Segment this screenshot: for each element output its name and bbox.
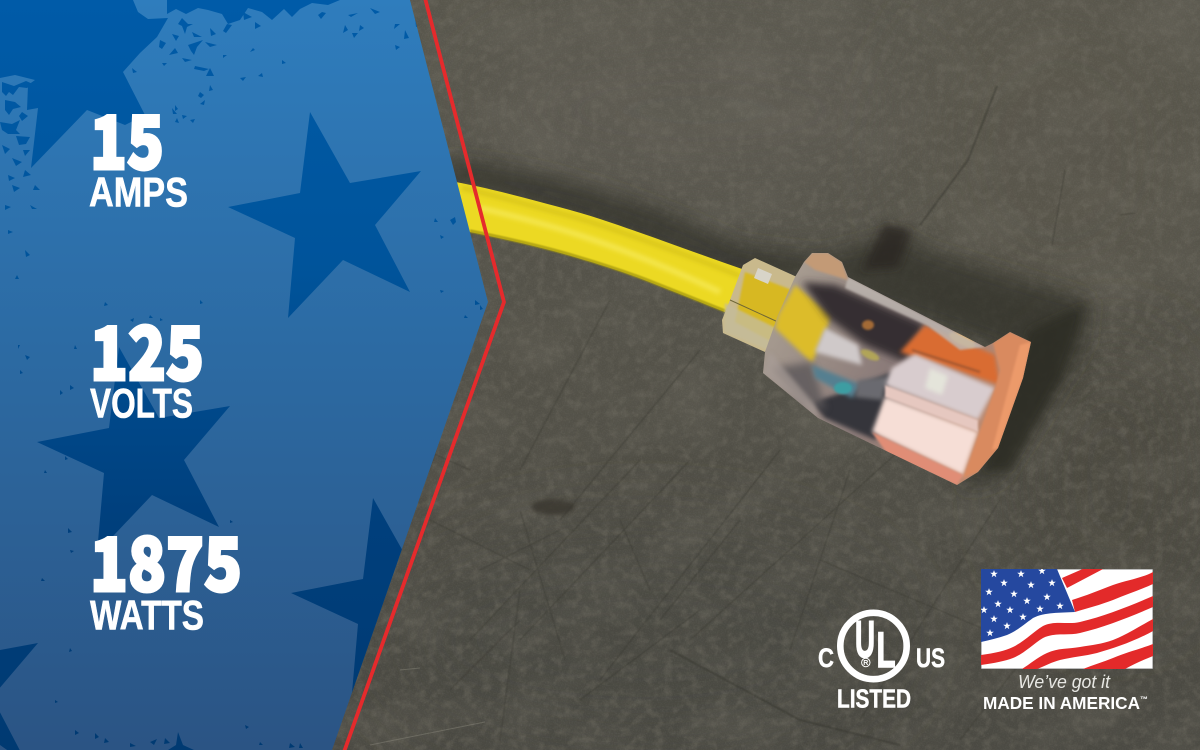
spec: 15 amps: 15	[90, 84, 164, 191]
shadow: cord and plug on floor	[440, 160, 1090, 490]
yellow extension cord	[445, 180, 745, 312]
star: behind 125 volts	[37, 347, 230, 553]
flag canton	[981, 569, 1075, 642]
badge: UL listed: US	[916, 643, 945, 673]
wires	[812, 365, 862, 398]
red chevron line	[344, 0, 504, 750]
white socket blocks	[885, 354, 995, 420]
dark internal wiring	[802, 282, 925, 362]
lit end cap	[963, 332, 1031, 478]
text: made in America: ™	[1140, 695, 1148, 704]
star: lower right, clipped	[291, 498, 402, 692]
blue chevron panel with stars	[0, 0, 488, 750]
star: bottom fragment	[168, 732, 194, 750]
star: top left	[0, 0, 168, 168]
star: center right	[228, 112, 421, 318]
text: We've got it: We’ve got it	[1018, 671, 1111, 692]
yellow cord inside plug	[775, 285, 832, 363]
plug collar	[722, 258, 797, 352]
star: top ragged band	[167, 0, 340, 24]
glowing plug connector	[722, 253, 1031, 485]
badge: UL listed: L	[876, 622, 896, 678]
text: made in America: MADE IN AMERICA	[983, 693, 1140, 713]
distressed flecks	[120, 8, 420, 123]
spec: 125 volts: 125	[90, 295, 204, 402]
spec: 1875 watts: WATTS	[90, 592, 204, 638]
pale inner reflection	[815, 328, 862, 365]
badge: American flag	[980, 567, 1153, 669]
badge: UL listed: R	[863, 660, 868, 667]
badge: UL listed: LISTED	[837, 684, 911, 714]
spec: 15 amps: AMPS	[89, 168, 188, 216]
star: bottom left, clipped	[0, 643, 38, 750]
spec: 125 volts: VOLTS	[90, 380, 193, 426]
badge: UL listed: C	[818, 643, 834, 673]
badge: UL listed	[818, 611, 945, 714]
spec: 1875 watts: 1875	[90, 506, 242, 613]
plug ridge highlight	[845, 277, 985, 350]
badge: UL listed: U	[855, 611, 875, 669]
plug body	[763, 253, 1031, 485]
orange glow	[900, 325, 1000, 385]
